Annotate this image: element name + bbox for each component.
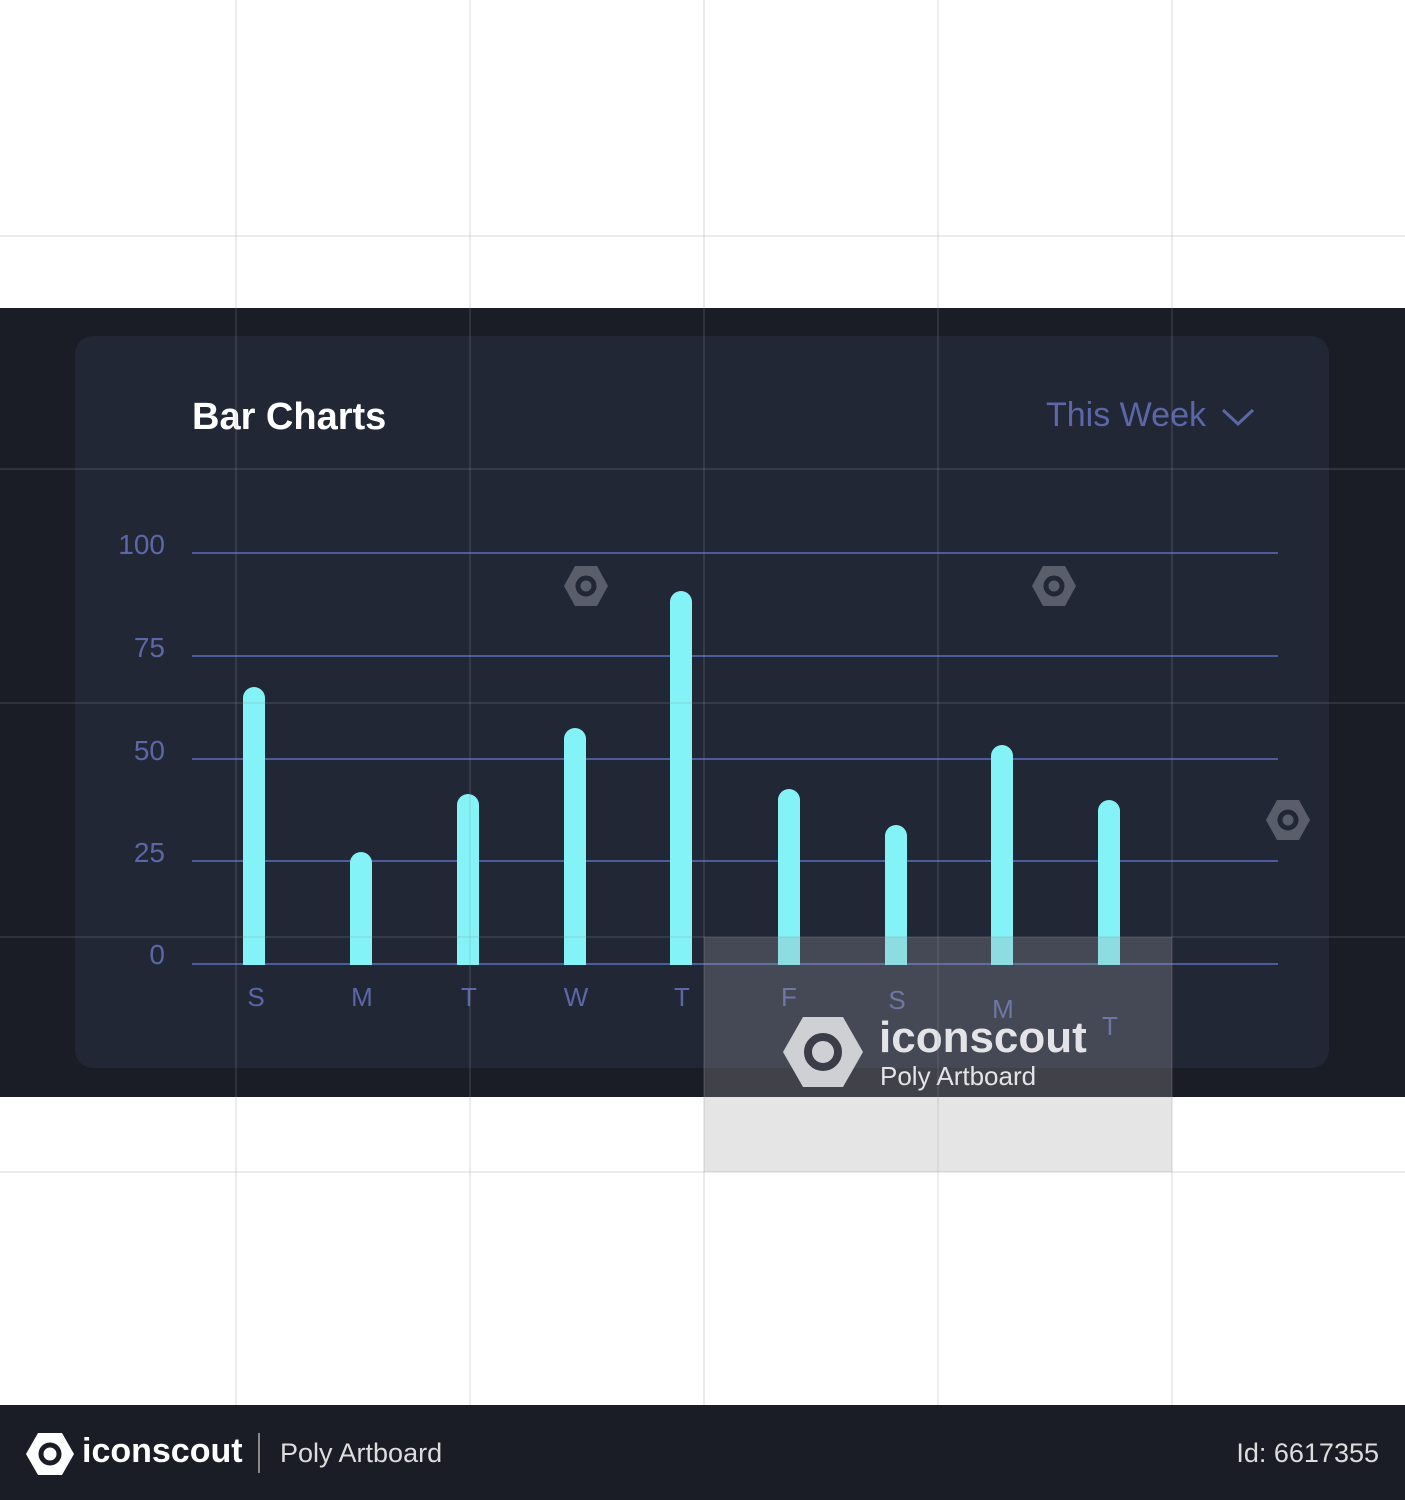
bar chart: 0	[149, 939, 165, 970]
title: Bar Charts	[192, 396, 386, 438]
bar chart: 100	[118, 529, 165, 560]
bar chart: M	[992, 994, 1014, 1024]
bar chart: T	[461, 982, 477, 1012]
bar chart: T	[674, 982, 690, 1012]
bar chart: 50	[134, 735, 165, 766]
bar chart: W	[564, 982, 589, 1012]
watermark logo: iconscout	[879, 1013, 1087, 1062]
bar chart: M	[351, 982, 373, 1012]
footer bar: Poly Artboard	[280, 1438, 442, 1468]
footer bar	[0, 1405, 1405, 1500]
icon: iconscout logo	[26, 1433, 74, 1475]
bar chart: 25	[134, 837, 165, 868]
footer bar: iconscout	[82, 1432, 243, 1470]
watermark logo	[783, 1013, 1087, 1091]
bar chart: T	[1102, 1011, 1118, 1041]
watermark overlay	[704, 937, 1172, 1172]
watermark logo: Poly Artboard	[880, 1061, 1036, 1091]
dark band background	[0, 308, 1405, 1097]
dropdown: This Week: This Week	[1046, 396, 1206, 434]
footer bar: Id: 6617355	[1236, 1438, 1379, 1468]
bar chart: S	[888, 985, 906, 1015]
bar chart: S	[247, 982, 265, 1012]
panel: chart card	[75, 336, 1329, 1068]
bar chart: F	[781, 982, 797, 1012]
bar chart: 75	[134, 632, 165, 663]
